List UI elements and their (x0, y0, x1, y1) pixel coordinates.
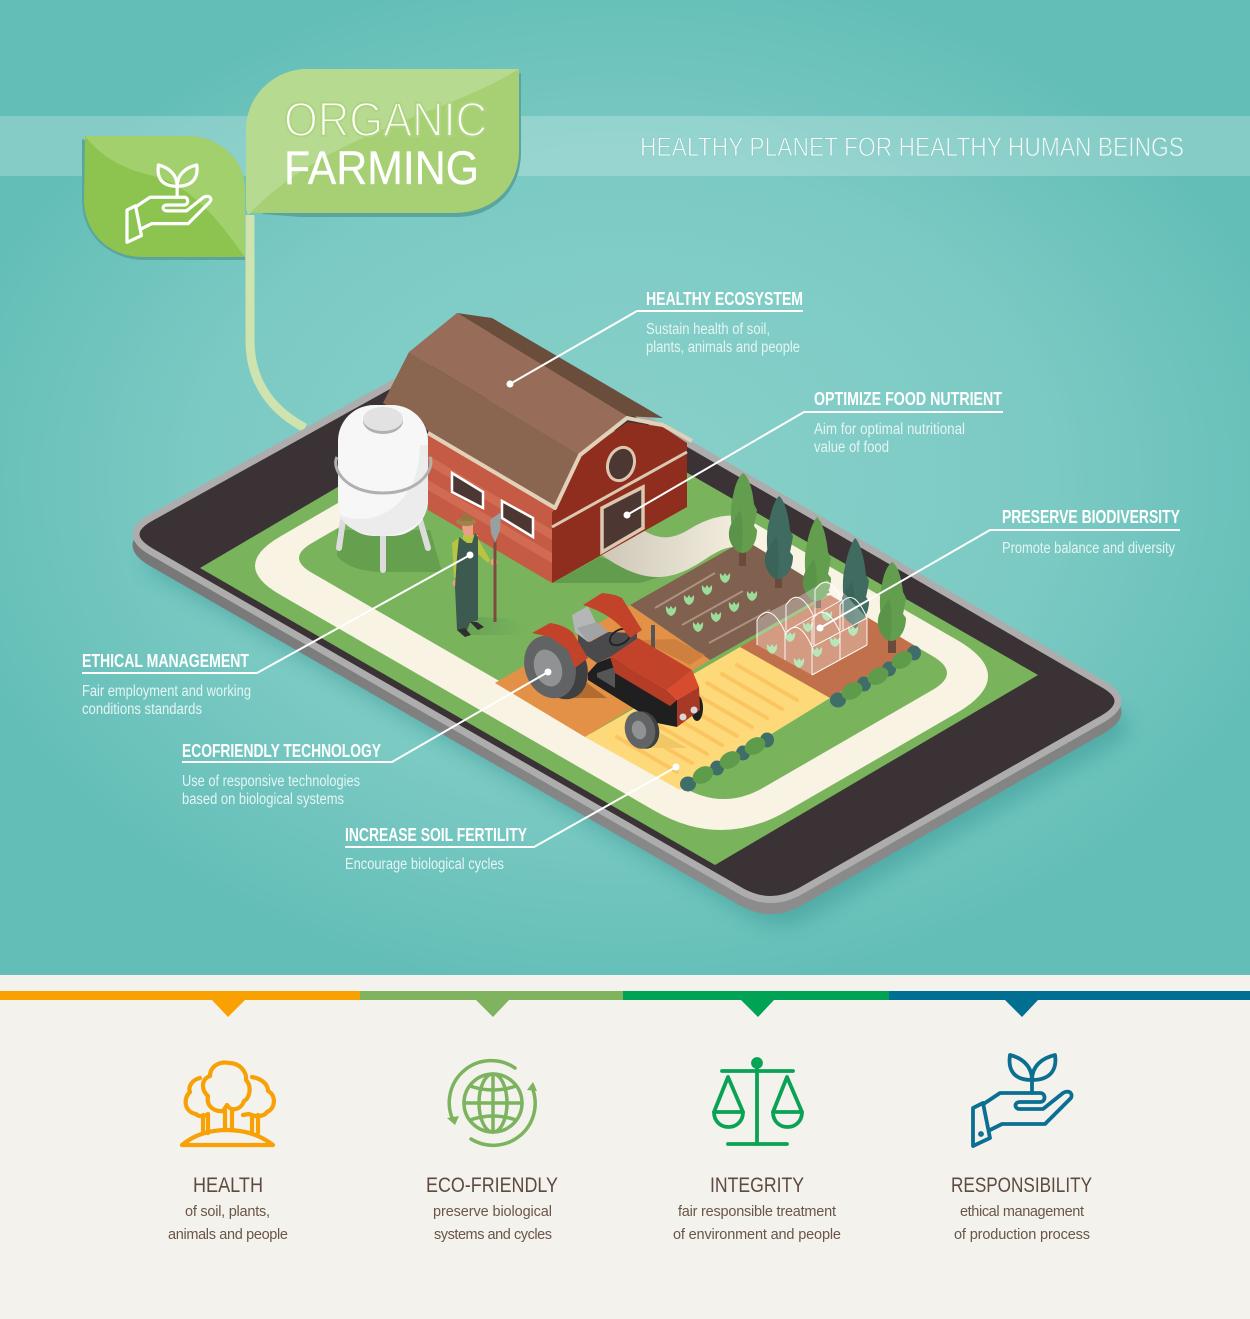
hedge: upper (830, 646, 921, 708)
column: responsibility: ethical management (960, 1204, 1084, 1220)
colour bar: orange (0, 991, 360, 1017)
brown plot rows (655, 573, 770, 643)
column: integrity: of environment and people (673, 1227, 841, 1243)
callout: healthy ecosystem: HEALTHY ECOSYSTEM (646, 288, 803, 309)
callout: ecofriendly technology (182, 668, 552, 808)
column: eco-friendly: ECO-FRIENDLY (426, 1174, 558, 1197)
column: integrity: INTEGRITY (710, 1174, 804, 1197)
callout: preserve biodiversity (816, 506, 1180, 632)
icon: hand with sprout, blue (973, 1055, 1072, 1146)
icon: scales (714, 1059, 802, 1144)
spade (494, 533, 496, 622)
callout: ecofriendly technology: Use of responsive technologies (182, 773, 360, 790)
greenhouse (757, 580, 867, 675)
silo (336, 405, 442, 572)
plot: orange soil (495, 605, 710, 737)
callout: preserve biodiversity: Promote balance and diversity (1002, 540, 1175, 557)
column: eco-friendly: systems and cycles (434, 1227, 552, 1243)
callout: increase soil fertility: Encourage biological cycles (345, 856, 504, 873)
colour bar: light green (360, 991, 623, 1017)
column: responsibility: of production process (954, 1227, 1090, 1243)
teal background (0, 0, 1250, 976)
column: health: animals and people (168, 1227, 288, 1243)
column: integrity: fair responsible treatment (678, 1204, 836, 1220)
callout: ecofriendly technology: ECOFRIENDLY TECHNOLOGY (182, 740, 381, 761)
callout: optimize food nutrient: Aim for optimal nutritional (814, 421, 965, 438)
column: health: HEALTH (193, 1174, 263, 1197)
farm path (602, 515, 745, 577)
header band (0, 116, 1250, 176)
callout: increase soil fertility (345, 764, 680, 873)
trees: back row (729, 473, 869, 628)
column: eco-friendly: preserve biological (433, 1204, 552, 1220)
callout: healthy ecosystem: Sustain health of soil, (646, 321, 770, 338)
colour bar: green (623, 991, 889, 1017)
title: FARMING: FARMING (284, 141, 479, 194)
callout: ecofriendly technology: based on biological systems (182, 791, 344, 808)
title: ORGANIC: ORGANIC (284, 94, 487, 147)
leaf logo: icon leaf (82, 136, 245, 260)
callout: optimize food nutrient (624, 388, 1003, 518)
bottom panel (0, 975, 1250, 1319)
icon: trees (182, 1063, 274, 1145)
callout: healthy ecosystem: plants, animals and people (646, 339, 800, 356)
tree: front (878, 562, 906, 653)
leaf logo: title leaf (246, 69, 521, 217)
farmer (452, 512, 528, 637)
hedge: lower (680, 732, 774, 792)
callout: ethical management: Fair employment and working (82, 683, 251, 700)
plot: yellow field (585, 647, 830, 790)
callout: optimize food nutrient: OPTIMIZE FOOD NUTRIENT (814, 388, 1003, 409)
icon: globe with arrows (447, 1061, 537, 1145)
column: responsibility (951, 1174, 1092, 1243)
plot: terracotta soil (740, 595, 917, 698)
callout: optimize food nutrient: value of food (814, 439, 889, 456)
tractor (516, 593, 705, 752)
screen: field (200, 378, 1038, 865)
road (255, 484, 988, 830)
callout: healthy ecosystem (506, 288, 803, 388)
callout: preserve biodiversity: PRESERVE BIODIVERSITY (1002, 506, 1180, 527)
callout: increase soil fertility: INCREASE SOIL FERTILITY (345, 824, 527, 845)
column: responsibility: RESPONSIBILITY (951, 1174, 1092, 1197)
seedlings (666, 573, 858, 668)
barn round window (603, 444, 639, 484)
barn shadow on grass (552, 557, 660, 583)
colour bar: blue (889, 991, 1250, 1017)
callout: ethical management (82, 552, 474, 718)
yellow field furrows (617, 665, 797, 772)
stem (250, 215, 305, 428)
barn (383, 313, 692, 583)
barn windows (452, 473, 483, 508)
icon: hand with sprout, white (127, 165, 211, 242)
barn door (602, 487, 643, 552)
callout: ethical management: conditions standards (82, 701, 202, 718)
column: health: of soil, plants, (185, 1204, 270, 1220)
column: eco-friendly (426, 1174, 558, 1243)
callout: ethical management: ETHICAL MANAGEMENT (82, 650, 250, 671)
column: integrity (673, 1174, 841, 1243)
column: health (168, 1174, 288, 1243)
plot: brown soil (630, 540, 830, 660)
tablet (136, 329, 1128, 926)
